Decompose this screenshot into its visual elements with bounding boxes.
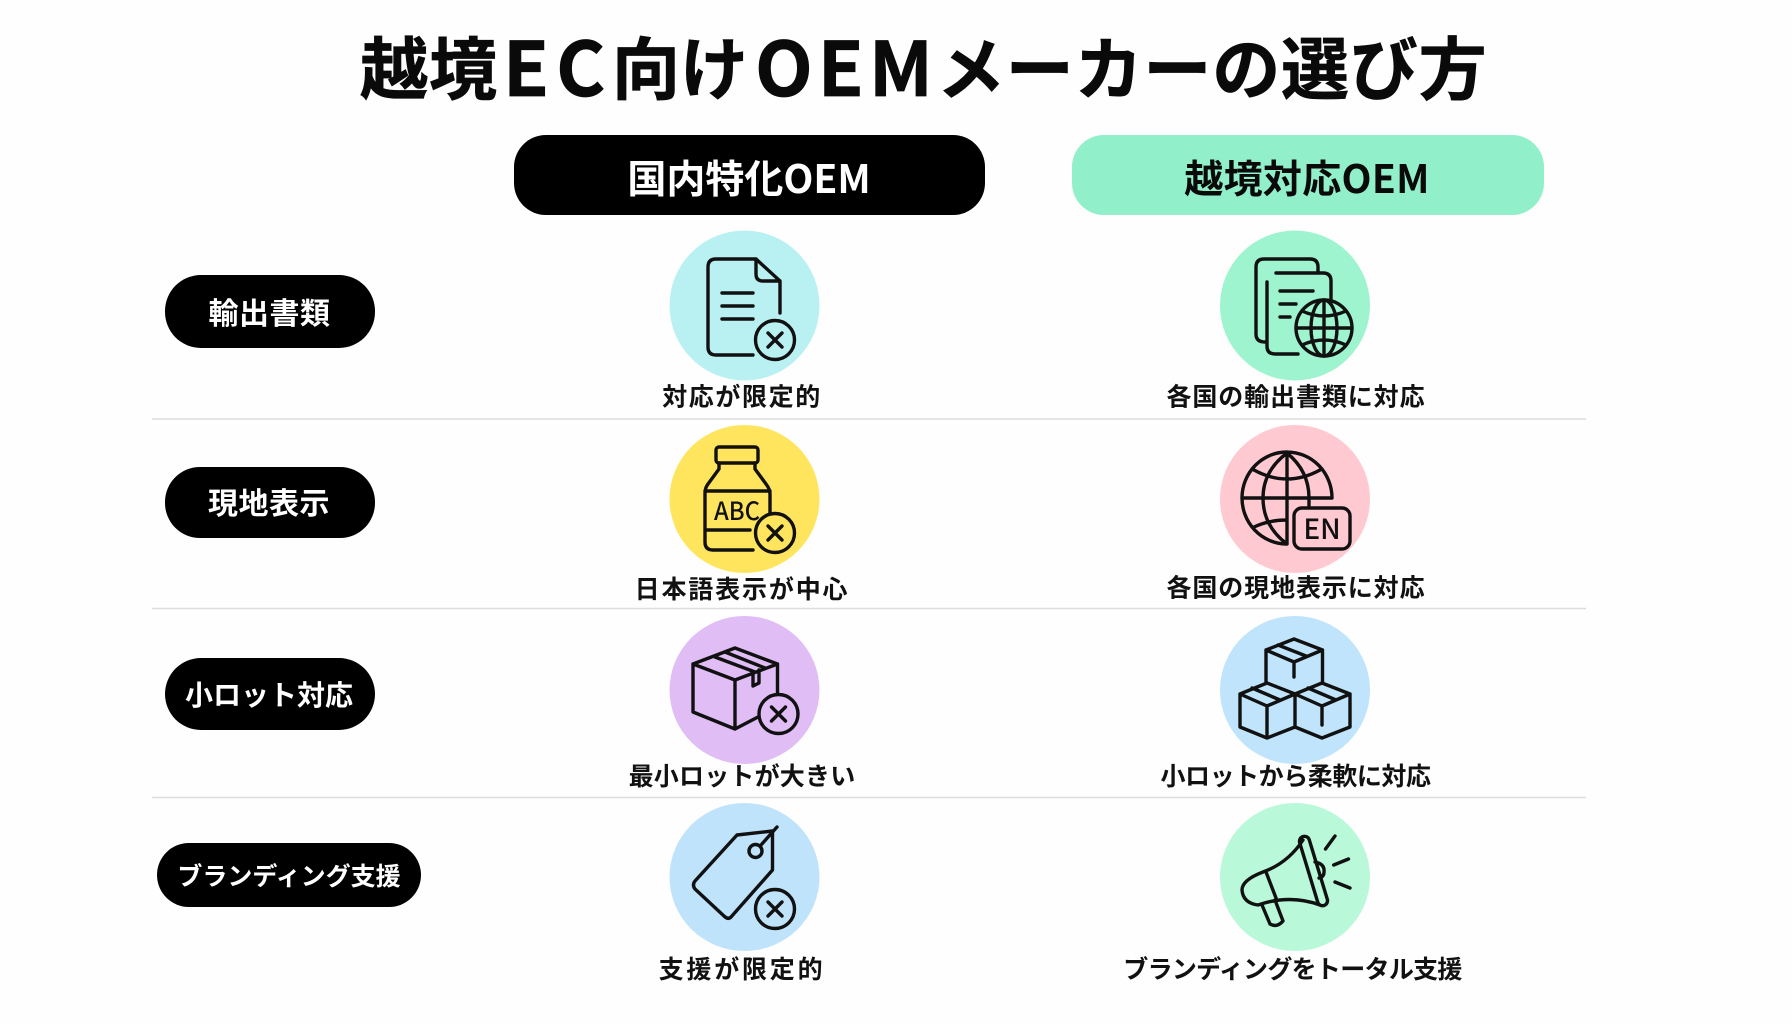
label: mainly Japanese labelling: 日本語表示が中心 — [635, 570, 849, 606]
icon: bottle with cross — [670, 425, 820, 573]
row label: local labelling — [165, 467, 375, 538]
column header: domestic OEM — [514, 135, 985, 215]
title: EC — [503, 9, 612, 118]
row label: small lot: 小ロット対応 — [185, 674, 353, 714]
label: supports export documents in each country: 各国の輸出書類に対応 — [1166, 378, 1426, 414]
column header: cross-border OEM: 越境対応OEM — [1184, 149, 1430, 205]
label: large minimum lot: 最小ロットが大きい — [629, 757, 855, 793]
icon: documents with globe — [1220, 230, 1370, 380]
label: limited support: 対応が限定的 — [662, 378, 822, 414]
row label: export documents — [165, 275, 375, 348]
icon: bottle with cross: ABC — [714, 492, 760, 528]
icon: document with cross — [670, 230, 820, 380]
row label: small lot — [165, 658, 375, 730]
row label: branding support — [157, 843, 421, 907]
title: 越境 — [360, 15, 498, 114]
icon: three boxes — [1220, 616, 1370, 764]
title: 向け — [612, 15, 748, 114]
title: メーカーの選び方 — [937, 15, 1487, 114]
row label: export documents: 輸出書類 — [208, 289, 330, 333]
label: flexible from small lots: 小ロットから柔軟に対応 — [1160, 757, 1431, 793]
icon: megaphone — [1220, 803, 1370, 951]
label: limited support: 支援が限定的 — [659, 950, 825, 986]
icon: globe with EN tag — [1220, 425, 1370, 573]
icon: box with cross — [670, 616, 820, 764]
title: OEM — [755, 9, 938, 118]
column header: domestic OEM: 国内特化OEM — [627, 149, 871, 205]
label: total branding support: ブランディングをトータル支援 — [1123, 950, 1462, 986]
icon: globe with EN tag: EN — [1303, 508, 1341, 548]
column header: cross-border OEM — [1072, 135, 1544, 215]
row label: branding support: ブランディング支援 — [177, 857, 401, 893]
row label: local labelling: 現地表示 — [208, 479, 330, 523]
label: supports local labelling in each country: 各国の現地表示に対応 — [1166, 568, 1426, 604]
icon: price tag with cross — [670, 803, 820, 951]
